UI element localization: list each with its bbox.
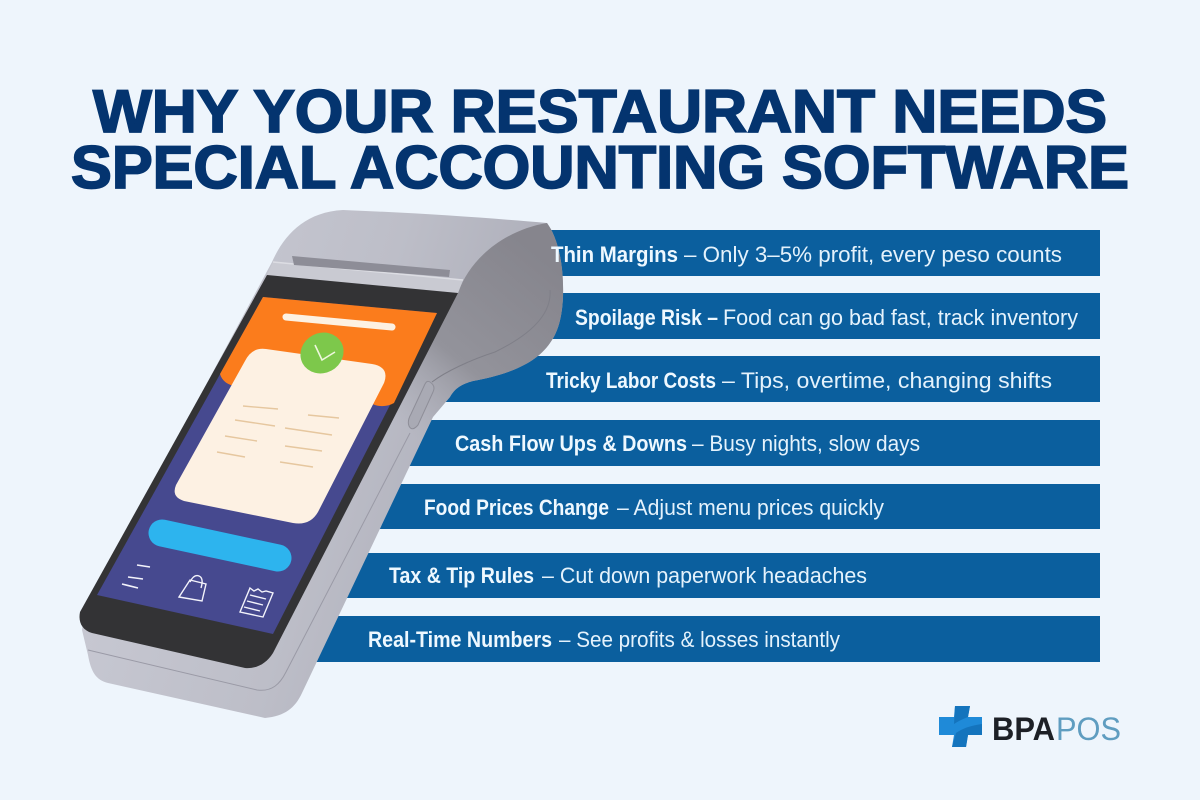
list item: real-time numbers: – See profits & losses instantly xyxy=(559,627,840,652)
list item: spoilage risk: Food can go bad fast, track inventory xyxy=(723,305,1078,330)
icon: medical cross xyxy=(939,706,982,747)
list item: real-time numbers xyxy=(368,627,840,652)
list item: tax and tip rules xyxy=(389,563,867,588)
orange header xyxy=(220,297,437,406)
list item: cash flow xyxy=(455,431,920,456)
list item: tricky labor costs: Tricky Labor Costs xyxy=(546,368,716,393)
title: WHY YOUR RESTAURANT NEEDS xyxy=(93,78,1107,145)
list item: tricky labor costs: – Tips, overtime, changing shifts xyxy=(722,368,1052,393)
list item: cash flow: – Busy nights, slow days xyxy=(692,431,920,456)
action button xyxy=(162,533,278,558)
title: SPECIAL ACCOUNTING SOFTWARE xyxy=(71,134,1129,201)
POS terminal illustration xyxy=(80,210,563,718)
list item: real-time numbers: Real-Time Numbers xyxy=(368,627,552,652)
logo: BPA POS: POS xyxy=(1056,711,1121,747)
printer slot xyxy=(273,256,463,280)
icon: shopping bag xyxy=(179,576,206,601)
list item: spoilage risk xyxy=(575,305,1078,330)
logo: BPA POS: BPA xyxy=(992,711,1055,747)
list item: tax and tip rules: Tax & Tip Rules xyxy=(389,563,534,588)
title xyxy=(71,78,1129,201)
body contour lines xyxy=(88,290,550,690)
side button xyxy=(408,381,434,429)
list item: food prices xyxy=(424,495,884,520)
screen bezel xyxy=(80,275,458,668)
list item: food prices: – Adjust menu prices quickly xyxy=(617,495,884,520)
list item: thin margins: – Only 3–5% profit, every peso counts xyxy=(684,242,1062,267)
terminal body xyxy=(82,210,563,718)
screen background xyxy=(97,297,437,634)
dark printer head xyxy=(380,223,563,470)
list bars xyxy=(310,230,1100,662)
receipt lines xyxy=(217,406,339,467)
printer band xyxy=(267,262,463,293)
list item: cash flow: Cash Flow Ups & Downs xyxy=(455,431,687,456)
icon: green check badge xyxy=(293,325,351,381)
list item: tax and tip rules: – Cut down paperwork headaches xyxy=(542,563,867,588)
list item: tricky labor costs xyxy=(546,368,1052,393)
list item: spoilage risk: Spoilage Risk – xyxy=(575,305,718,330)
icon: menu xyxy=(122,565,150,588)
list item: food prices: Food Prices Change xyxy=(424,495,609,520)
receipt card xyxy=(175,349,386,524)
header pill xyxy=(286,317,392,327)
list item: thin margins: Thin Margins xyxy=(551,242,678,267)
logo: BPA POS xyxy=(939,706,1121,747)
icon: receipt xyxy=(240,588,273,617)
